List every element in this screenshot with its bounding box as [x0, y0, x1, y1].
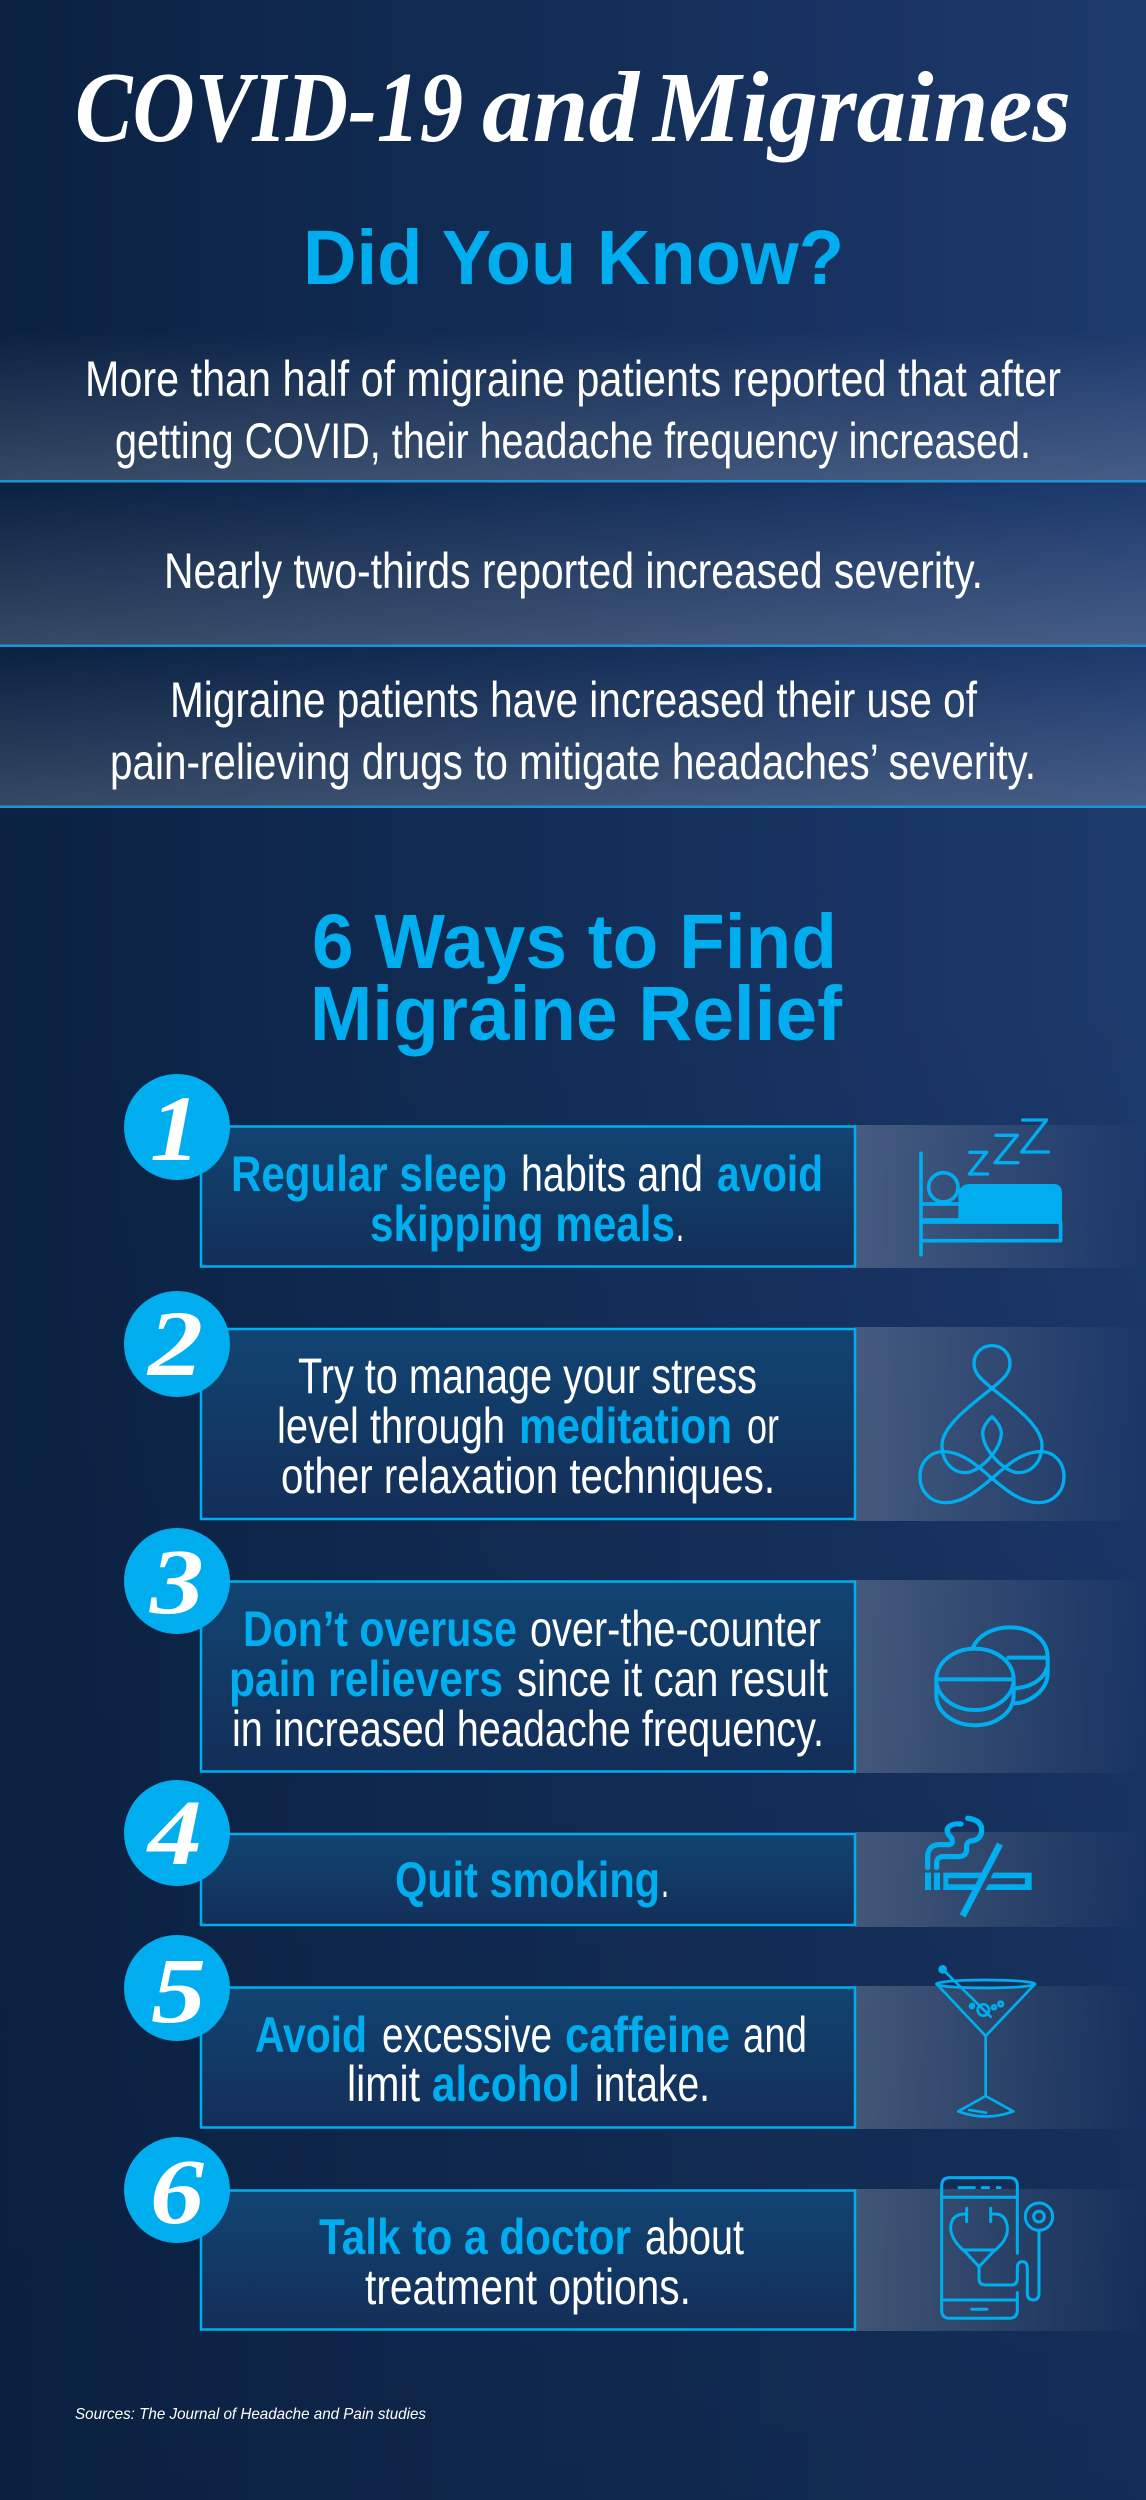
panel: tip 1: skipping meals: [370, 1196, 675, 1252]
panel: tip 5: limit: [347, 2056, 420, 2112]
panel: fact 3: [0, 647, 1146, 808]
panel: tip 6: about: [645, 2209, 744, 2265]
panel: tip 1: [124, 1074, 1146, 1268]
panel: tip 4: Quit smoking: [395, 1852, 660, 1908]
heading: 6 ways: 6 Ways to Find: [312, 899, 837, 985]
panel: fact 1: [0, 330, 1146, 482]
panel: tip 2: level through: [277, 1398, 505, 1454]
panel: tip 2: [124, 1291, 1146, 1521]
panel: tip 2: or: [747, 1398, 779, 1454]
panel: tip 3: 3: [149, 1531, 204, 1634]
panel: tip 1: Regular sleep: [231, 1146, 507, 1202]
panel: tip 4: [124, 1780, 1146, 1927]
title: [75, 51, 1071, 163]
panel: fact 2: Nearly two-thirds reported increased severity.: [164, 543, 983, 599]
heading: did you know: Did You Know?: [303, 215, 844, 301]
heading: 6 ways: Migraine Relief: [310, 971, 842, 1057]
panel: tip 2: 2: [146, 1293, 203, 1396]
panel: tip 3: since it can result: [517, 1651, 828, 1707]
heading: 6 ways: [310, 899, 842, 1057]
icon: no smoking: [925, 1818, 1032, 1916]
panel: tip 5: Avoid: [255, 2007, 367, 2063]
panel: tip 5: intake.: [595, 2056, 710, 2112]
title: Migraines: [651, 51, 1071, 163]
panel: tip 6: Talk to a doctor: [319, 2209, 631, 2265]
panel: tip 2: meditation: [519, 1398, 732, 1454]
panel: tip 5: [124, 1935, 1146, 2129]
icon: martini glass: [936, 1966, 1035, 2116]
panel: tip 5: and: [743, 2007, 807, 2063]
panel: tip 3: [124, 1528, 1146, 1773]
panel: tip 6: 6: [150, 2141, 205, 2244]
panel: tip 3: in increased headache frequency.: [232, 1701, 824, 1757]
panel: tip 5: caffeine: [565, 2007, 730, 2063]
panel: tip 4: .: [661, 1852, 669, 1908]
panel: tip 5: 5: [151, 1940, 206, 2043]
panel: fact 3: Migraine patients have increased their use of: [170, 672, 977, 728]
panel: tip 2: Try to manage your stress: [298, 1348, 757, 1404]
panel: tip 6: [124, 2137, 1146, 2331]
icon: pills: [936, 1627, 1048, 1725]
panel: tip 3: over-the-counter: [530, 1601, 821, 1657]
panel: tip 3: Don’t overuse: [243, 1601, 517, 1657]
panel: tip 1: .: [676, 1196, 684, 1252]
icon: meditation figure: [920, 1346, 1064, 1503]
panel: tip 1: habits and: [521, 1146, 703, 1202]
panel: tip 6: treatment options.: [365, 2259, 691, 2315]
panel: tip 3: pain relievers: [229, 1651, 503, 1707]
panel: tip 5: alcohol: [432, 2056, 580, 2112]
icon: sleeping in bed: [921, 1120, 1062, 1255]
title: COVID-19: [75, 51, 463, 163]
panel: tip 4: 4: [146, 1782, 202, 1885]
panel: tip 1: 1: [150, 1078, 200, 1181]
sources note: Sources: The Journal of Headache and Pain studies: [75, 2406, 426, 2423]
panel: tip 1: avoid: [717, 1146, 823, 1202]
title: and: [482, 51, 640, 163]
icon: phone with stethoscope: [942, 2178, 1053, 2318]
panel: tip 5: excessive: [382, 2007, 552, 2063]
panel: fact 2: [0, 483, 1146, 647]
panel: tip 2: other relaxation techniques.: [281, 1448, 775, 1504]
